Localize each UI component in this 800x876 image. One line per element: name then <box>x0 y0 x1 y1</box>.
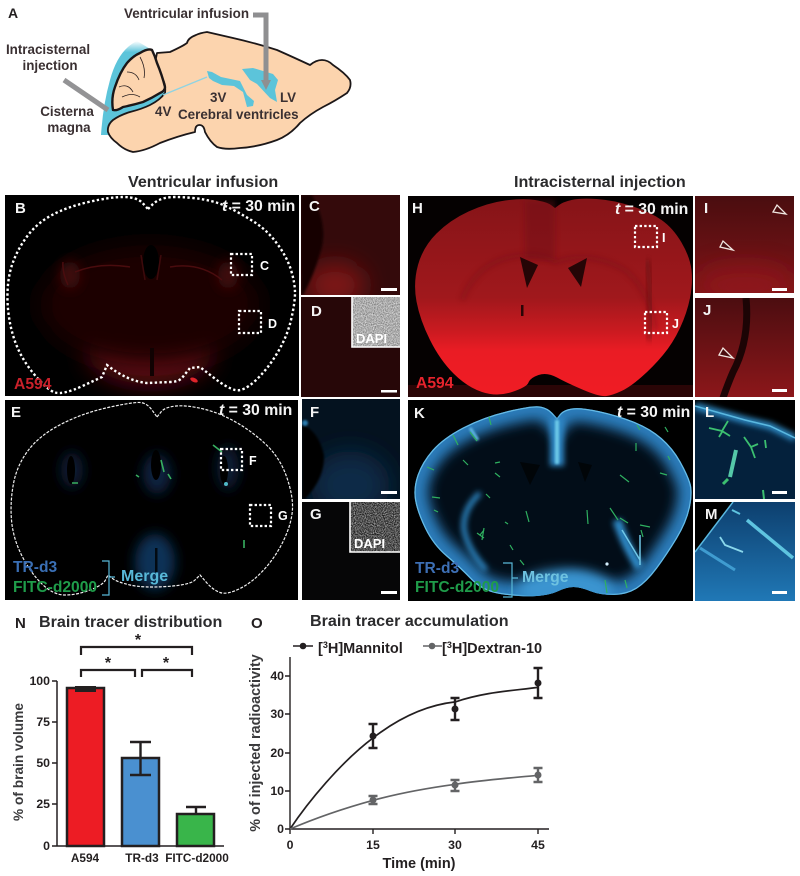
label J: J <box>672 317 679 331</box>
channel label FITC-d2000: FITC-d2000 <box>415 579 499 596</box>
label cisterna magna: magna <box>47 120 91 135</box>
heading: intracisternal injection: Intracisternal injection <box>514 173 686 191</box>
arrowhead J <box>719 348 733 358</box>
legend mannitol: H]Mannitol <box>328 641 403 657</box>
bright streaks <box>747 520 793 558</box>
arrowhead top <box>773 205 786 214</box>
scale bar C <box>381 288 397 291</box>
y tick labels: 0 <box>277 822 284 836</box>
aqueduct line <box>163 77 207 95</box>
scale bar M <box>772 591 787 594</box>
y tick labels: 100 <box>29 674 50 688</box>
green vessels <box>427 417 670 593</box>
time stamp: t = 30 min <box>222 198 295 215</box>
cisterna magna CSF space <box>101 41 166 135</box>
arrowhead lower <box>720 241 733 250</box>
scale bar F <box>381 491 397 494</box>
region box C <box>231 254 252 275</box>
DAPI inset: DAPI <box>356 331 387 346</box>
merge label: Merge <box>522 569 569 586</box>
curve mannitol <box>290 668 542 829</box>
time stamp: t = 30 min <box>617 404 690 421</box>
cerebellar folds <box>119 57 144 97</box>
third ventricle <box>207 71 254 107</box>
significance brackets: * <box>163 655 170 672</box>
y tick labels: 10 <box>270 784 284 798</box>
x labels: A594 <box>71 851 100 865</box>
y tick labels <box>270 669 284 836</box>
legend mannitol <box>293 640 403 657</box>
merge label: Merge <box>121 568 168 585</box>
x tick labels: 0 <box>287 838 294 852</box>
merge bracket <box>102 561 115 595</box>
y tick labels: 30 <box>270 707 284 721</box>
channel label FITC-d2000: FITC-d2000 <box>13 579 97 596</box>
label LV: LV <box>280 90 296 105</box>
bar TR-d3 <box>122 758 159 846</box>
region box G <box>250 505 271 526</box>
panel B: A594 ventricular <box>5 195 299 396</box>
scale bar L <box>772 491 787 494</box>
y tick labels: 75 <box>36 715 50 729</box>
time stamp: t = 30 min <box>615 201 688 218</box>
DAPI inset: DAPI <box>354 536 385 551</box>
green vessels L <box>709 421 766 458</box>
y tick labels <box>29 674 50 853</box>
y tick labels: 0 <box>43 839 50 853</box>
legend mannitol: [ <box>318 641 323 657</box>
chart O: brain tracer accumulation <box>248 612 549 872</box>
legend dextran: H]Dextran-10 <box>452 641 542 657</box>
scale bar I <box>772 288 787 291</box>
brain outline dashed <box>11 402 293 595</box>
letter H: H <box>412 200 423 217</box>
y tick labels: 25 <box>36 797 50 811</box>
panel L <box>695 400 795 499</box>
x labels <box>71 851 229 865</box>
panel D <box>301 297 400 397</box>
label I: I <box>662 231 665 245</box>
legend mannitol: 3 <box>323 640 328 650</box>
letter K: K <box>414 405 425 422</box>
label G: G <box>278 509 288 523</box>
letter J: J <box>703 302 711 319</box>
axes <box>52 681 224 846</box>
panel letter A: A <box>8 5 18 21</box>
significance brackets: * <box>135 632 142 649</box>
scale bar G <box>381 591 397 594</box>
arrow: ventricular infusion <box>253 15 271 90</box>
channel label TR-d3: TR-d3 <box>13 559 58 576</box>
significance brackets: * <box>105 655 112 672</box>
region box F <box>221 449 242 470</box>
bar A594 <box>67 688 104 846</box>
scale bar J <box>772 389 787 392</box>
chart N: brain tracer distribution <box>11 613 229 865</box>
brain section blue <box>414 406 692 596</box>
label C: C <box>260 259 269 273</box>
region box I <box>635 226 657 247</box>
lateral ventricle <box>242 68 278 102</box>
label intracisternal injection: Intracisternal <box>6 42 90 57</box>
label ventricular infusion: Ventricular infusion <box>124 6 249 21</box>
brain body <box>108 32 351 152</box>
title N: Brain tracer distribution <box>39 613 222 631</box>
error bars <box>130 742 206 814</box>
arrow: intracisternal injection <box>64 80 108 110</box>
panel I <box>695 196 794 293</box>
panel H: A594 intracisternal <box>408 196 693 397</box>
legend dextran: [ <box>442 641 447 657</box>
legend dextran: 3 <box>447 640 452 650</box>
error bar A594 <box>75 686 96 692</box>
panel letter B: B <box>15 200 26 217</box>
y tick labels: 20 <box>270 746 284 760</box>
panel K: tracers intracisternal <box>408 400 693 610</box>
significance brackets <box>81 632 192 677</box>
cerebellum <box>112 49 165 110</box>
label intracisternal injection: injection <box>22 58 78 73</box>
panel C <box>301 195 400 295</box>
time stamp: t = 30 min <box>219 402 292 419</box>
x tick labels: 30 <box>448 838 462 852</box>
label D: D <box>268 317 277 331</box>
letter E: E <box>11 404 21 421</box>
panel M <box>695 502 795 601</box>
y axis label: % of injected radioactivity <box>248 654 264 832</box>
dark fissure <box>723 298 747 398</box>
brain section red <box>415 199 692 396</box>
panel A: sagittal brain schematic <box>6 5 351 152</box>
panel E: tracers ventricular <box>5 400 298 600</box>
dark ventricles <box>520 462 592 485</box>
channel label A594: A594 <box>14 376 52 393</box>
y tick labels: 40 <box>270 669 284 683</box>
axes <box>285 657 549 834</box>
letter I: I <box>704 200 708 217</box>
y tick labels: 50 <box>36 756 50 770</box>
panel J <box>695 298 794 398</box>
x labels: TR-d3 <box>125 851 159 865</box>
label 4V: 4V <box>155 104 171 119</box>
channel label A594: A594 <box>416 375 454 392</box>
ventricles dark <box>520 257 538 288</box>
label F: F <box>249 454 257 468</box>
panel F <box>302 399 400 499</box>
x labels: FITC-d2000 <box>165 851 229 865</box>
region box J <box>645 312 667 333</box>
label cisterna magna: Cisterna <box>40 104 94 119</box>
y axis label: % of brain volume <box>11 703 26 821</box>
x axis label: Time (min) <box>382 856 456 872</box>
letter O: O <box>251 615 263 632</box>
scale bar D <box>381 390 397 392</box>
label cerebral ventricles: Cerebral ventricles <box>178 107 299 122</box>
letter L: L <box>705 404 714 421</box>
merge bracket <box>503 563 518 597</box>
letter F: F <box>310 404 319 421</box>
x tick labels <box>287 838 545 852</box>
channel label TR-d3: TR-d3 <box>415 560 460 577</box>
panel G <box>302 502 400 600</box>
label 3V: 3V <box>210 90 226 105</box>
letter N: N <box>15 615 26 632</box>
brain outline dotted <box>7 197 295 393</box>
letter G: G <box>310 506 322 523</box>
heading: ventricular infusion: Ventricular infusion <box>128 173 278 191</box>
letter C: C <box>309 198 320 215</box>
letter M: M <box>705 506 718 523</box>
curve dextran <box>290 768 542 829</box>
letter D: D <box>311 303 322 320</box>
x tick labels: 45 <box>531 838 545 852</box>
x tick labels: 15 <box>366 838 380 852</box>
bar FITC-d2000 <box>177 814 214 846</box>
title O: Brain tracer accumulation <box>310 612 509 630</box>
region box D <box>239 311 261 333</box>
